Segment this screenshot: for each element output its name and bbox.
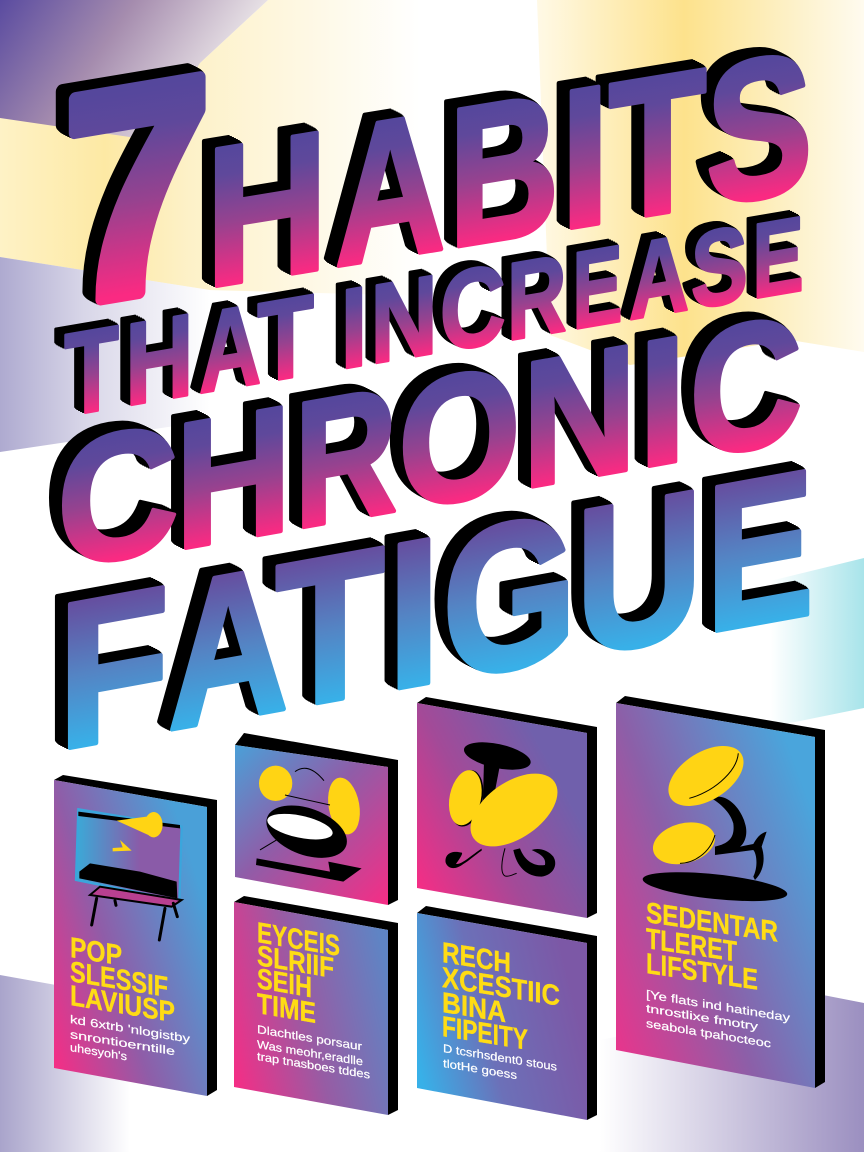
- title line: CHRONIC: N: [522, 306, 637, 527]
- title line: 7 HABITS: B: [448, 51, 559, 290]
- text: TV heading: [70, 932, 175, 1029]
- title line: THAT INCREASE: S: [691, 202, 748, 332]
- text: binge heading: BINA: [442, 987, 506, 1029]
- title line: FATIGUE: I: [386, 493, 441, 735]
- title line: CHRONIC: R: [294, 348, 397, 567]
- title line: THAT INCREASE: T: [64, 302, 119, 442]
- panel: TV habit: [54, 775, 217, 1096]
- text: screen time heading: EYCEIS: [257, 917, 340, 963]
- title line: FATIGUE: U: [576, 445, 703, 701]
- text: sedentary heading: TLERET: [646, 923, 737, 969]
- title line: CHRONIC: I: [638, 297, 687, 507]
- text: sedentary description: [Ye flats ind hatineday: [646, 989, 790, 1025]
- title line: THAT INCREASE: N: [370, 252, 438, 389]
- text: binge heading: [442, 937, 560, 1057]
- text: TV description: uhesyoh's: [70, 1042, 127, 1063]
- text: screen time heading: [257, 917, 340, 1030]
- title line: THAT INCREASE: A: [629, 211, 689, 343]
- panel: screen time habit: [234, 896, 398, 1115]
- text: TV description: snrontioerntille: [70, 1029, 175, 1058]
- title line: 7 HABITS: S: [706, 10, 813, 248]
- title line: THAT INCREASE: [64, 193, 804, 442]
- text: screen time description: Was meohr,eradlle: [257, 1039, 363, 1068]
- icon: alarm clock: [256, 766, 364, 882]
- text: screen time heading: SEIH: [257, 963, 312, 1004]
- title line: FATIGUE: [58, 424, 814, 794]
- text: binge heading: FIPEITY: [442, 1011, 528, 1057]
- panel: sedentary lifestyle: [616, 696, 825, 1088]
- title line: FATIGUE: E: [706, 424, 814, 677]
- title line: 7 HABITS: H: [205, 89, 328, 330]
- title line: 7 HABITS: [63, 10, 813, 369]
- text: TV description: kd 6xtrb 'nlogistby: [70, 1014, 190, 1046]
- title line: CHRONIC: [57, 276, 802, 608]
- title line: THAT INCREASE: A: [199, 278, 261, 418]
- text: screen time description: Dlachtles porsaur: [257, 1024, 362, 1053]
- title line: CHRONIC: O: [398, 327, 521, 550]
- text: binge heading: XCESTIIC: [442, 962, 560, 1013]
- text: TV heading: SLESSIF: [70, 956, 168, 1004]
- panel: alarm clock icon: [235, 733, 398, 905]
- text: screen time description: trap tnasboes tddes: [257, 1051, 370, 1082]
- title line: 7 HABITS: A: [335, 68, 446, 309]
- title line: THAT INCREASE: I: [340, 262, 368, 393]
- text: TV heading: LAVIUSP: [70, 980, 175, 1029]
- icon: abstract figure: [444, 737, 570, 877]
- text: sedentary description: [646, 989, 790, 1051]
- text: binge heading: RECH: [442, 937, 511, 980]
- title line: CHRONIC: H: [175, 366, 292, 589]
- panel: figure icon: [417, 697, 597, 918]
- title line: FATIGUE: G: [442, 467, 577, 725]
- title line: FATIGUE: T: [275, 503, 385, 755]
- text: sedentary heading: [646, 897, 778, 997]
- title line: THAT INCREASE: E: [752, 193, 804, 322]
- panel: binge habit: [417, 906, 597, 1120]
- icon: TV on a table: [76, 809, 182, 940]
- title line: CHRONIC: C: [689, 276, 802, 497]
- title line: FATIGUE: A: [168, 521, 288, 775]
- text: screen time description: [257, 1024, 370, 1082]
- title line: THAT INCREASE: E: [572, 222, 623, 354]
- text: binge description: [443, 1043, 557, 1082]
- title line: 7 HABITS: T: [609, 27, 707, 264]
- text: binge description: D tcsrhsdent0 stous: [443, 1043, 557, 1074]
- title line: THAT INCREASE: H: [125, 288, 194, 431]
- text: screen time heading: TIME: [257, 988, 316, 1030]
- title line: 7 HABITS: I: [559, 41, 611, 272]
- title: [57, 10, 814, 794]
- text: TV heading: POP: [70, 932, 122, 973]
- text: sedentary heading: SEDENTAR: [646, 897, 778, 949]
- text: sedentary description: seabola tpahocteoc: [646, 1018, 771, 1051]
- icon: reclining figure on a base: [641, 734, 789, 907]
- title line: CHRONIC: C: [57, 386, 179, 608]
- text: sedentary heading: LIFSTYLE: [646, 948, 758, 997]
- title line: THAT INCREASE: C: [440, 240, 506, 376]
- title line: 7 HABITS: 7: [63, 12, 211, 369]
- title line: THAT INCREASE: R: [507, 230, 567, 364]
- title line: FATIGUE: F: [58, 541, 169, 794]
- text: sedentary description: tnrostlixe fmotry: [646, 1003, 758, 1034]
- title line: THAT INCREASE: T: [257, 271, 314, 408]
- text: TV description: [70, 1014, 190, 1063]
- text: binge description: tlotHe goess: [443, 1058, 517, 1082]
- text: screen time heading: SLRIIF: [257, 940, 334, 985]
